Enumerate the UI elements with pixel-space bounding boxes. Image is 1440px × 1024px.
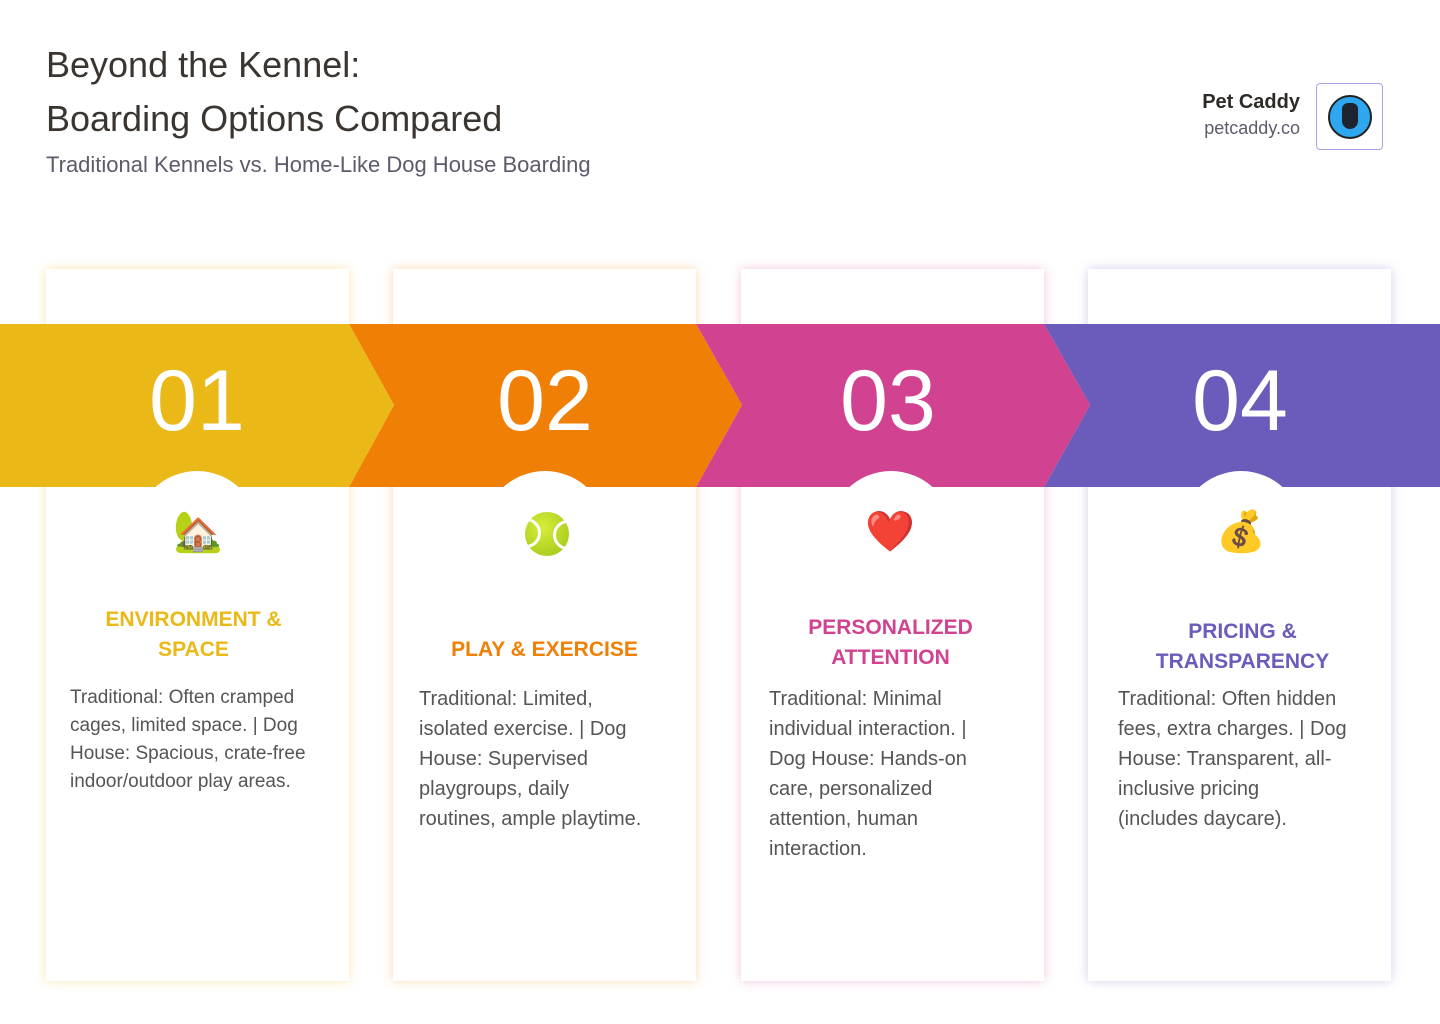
card 4: [1088, 269, 1391, 981]
subtitle: Traditional Kennels vs. Home-Like Dog House Boarding: [46, 152, 591, 177]
text 2: routines, ample playtime.: [419, 808, 641, 830]
text 2: isolated exercise. | Dog: [419, 718, 627, 740]
brand text: petcaddy.co: [1204, 118, 1300, 138]
text 2: [419, 688, 641, 830]
text 2: Traditional: Limited,: [419, 688, 593, 710]
icon circles: [135, 471, 259, 595]
icon: house: 🏡: [173, 508, 223, 555]
text: 03: [840, 353, 936, 449]
heading 4: TRANSPARENCY: [1156, 650, 1329, 673]
heading 1: ENVIRONMENT &: [105, 608, 282, 631]
brand text: [1202, 91, 1300, 138]
logo: [1316, 83, 1383, 150]
text 4: Traditional: Often hidden fees, extra charges. | Dog House: Transparent, all-inclusive pricing: [1118, 688, 1347, 800]
icon: heart: ❤️: [865, 508, 915, 555]
text 4: (includes daycare).: [1118, 808, 1287, 830]
heading 4: PRICING &: [1188, 620, 1297, 643]
heading 1: SPACE: [158, 638, 229, 661]
heading 3: ATTENTION: [831, 646, 950, 669]
brand: [1202, 83, 1383, 150]
text 1: Traditional: Often cramped cages, limited space. | Dog House: Spacious, crate-free indoor/outdoor play areas.: [70, 687, 306, 792]
card 3: [741, 269, 1044, 981]
brand text: Pet Caddy: [1202, 91, 1300, 113]
heading 3: PERSONALIZED: [808, 616, 973, 639]
arrow band: [0, 324, 1440, 487]
numbers: 01: [149, 353, 245, 449]
text: 04: [1192, 353, 1288, 449]
icon: money: 💰: [1216, 508, 1266, 555]
text: 02: [497, 353, 593, 449]
card 1: [46, 269, 349, 981]
heading 4: [1156, 620, 1329, 673]
heading 2: PLAY & EXERCISE: [451, 638, 638, 661]
text 2: House: Supervised: [419, 748, 588, 770]
heading 1: [105, 608, 282, 661]
icon: ball: [525, 512, 569, 556]
card 2: [393, 269, 696, 981]
text 2: playgroups, daily: [419, 778, 569, 800]
title: Beyond the Kennel:: [46, 44, 360, 85]
text 3: Traditional: Minimal individual interaction. | Dog House: Hands-on care, personalized attention, human interaction.: [769, 688, 967, 860]
heading 3: [808, 616, 973, 669]
title: [46, 44, 502, 139]
title: Boarding Options Compared: [46, 98, 502, 139]
